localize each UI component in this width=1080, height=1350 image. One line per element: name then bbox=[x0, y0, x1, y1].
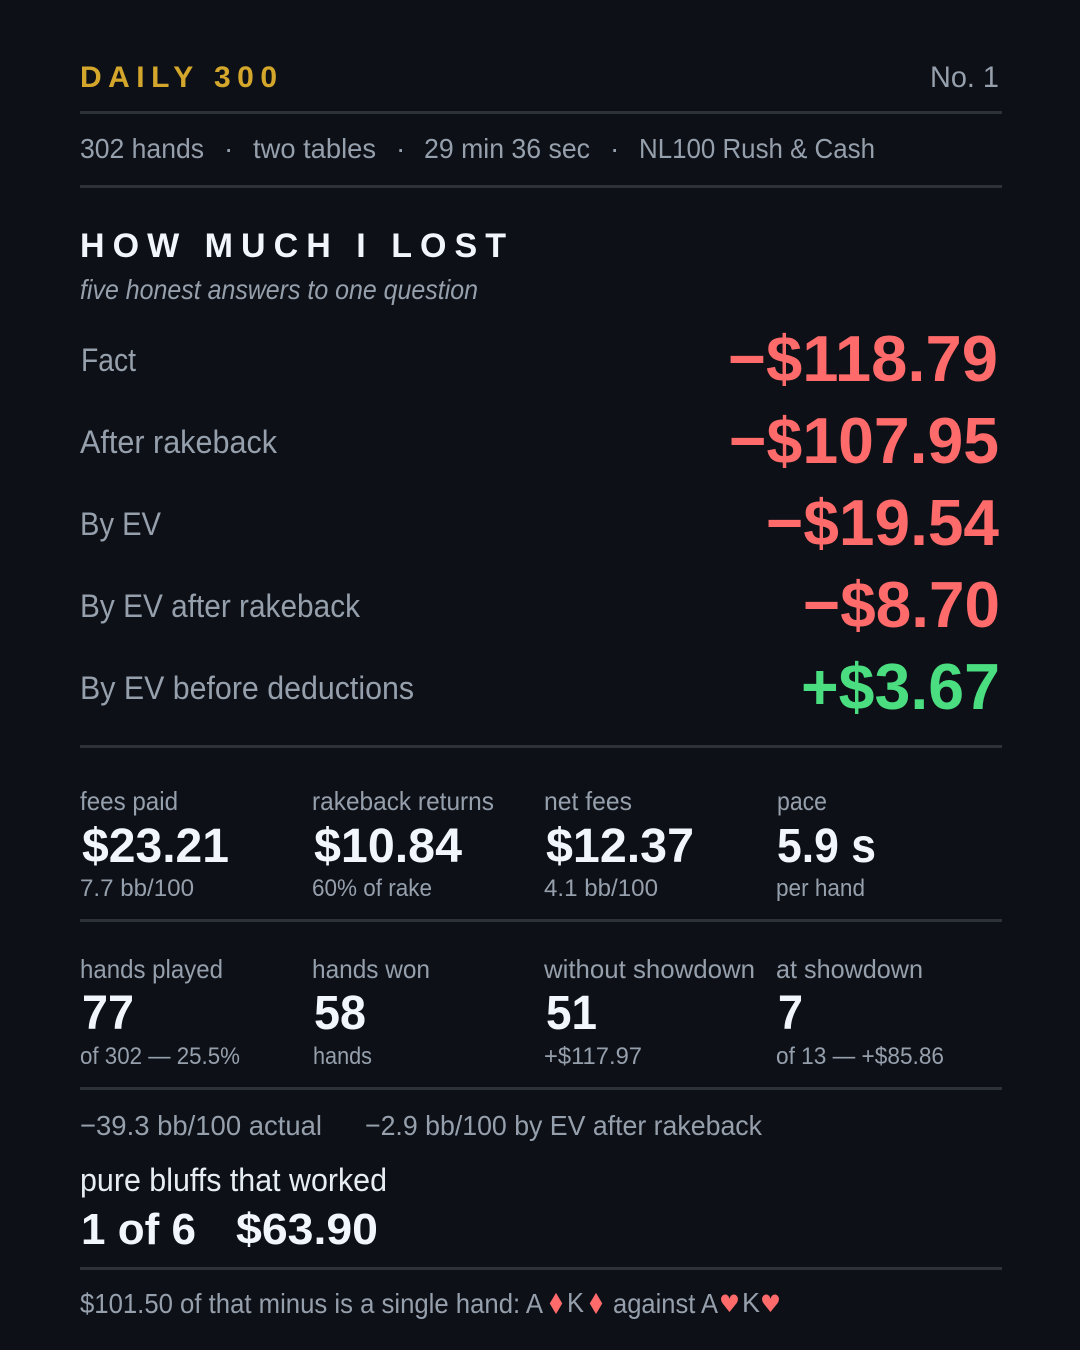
heading: how much I lost: HOW MUCH I LOST bbox=[80, 227, 506, 265]
stat: rakeback returns: $10.84 bbox=[314, 820, 462, 873]
row: by EV after rakeback bbox=[80, 568, 1000, 641]
stats row: fees bbox=[80, 786, 876, 902]
footer note: $101.50 of that minus is a single hand: A bbox=[80, 1288, 543, 1319]
title: Daily 300: DAILY 300 bbox=[80, 61, 277, 94]
footer note: ♦ bbox=[586, 1287, 606, 1321]
row: by EV before deductions: By EV before deductions bbox=[80, 670, 414, 706]
stat: fees paid: 7.7 bb/100 bbox=[80, 875, 194, 902]
stat: without showdown bbox=[543, 954, 755, 1070]
footer note: K bbox=[742, 1287, 760, 1318]
footer note: K bbox=[567, 1287, 584, 1318]
heading: how much I lost bbox=[80, 227, 506, 305]
stat: hands played bbox=[80, 954, 240, 1070]
pure bluffs bbox=[80, 1162, 387, 1254]
session summary: · bbox=[224, 133, 233, 164]
footer note: ♥ bbox=[760, 1290, 781, 1318]
stat: fees paid: fees paid bbox=[80, 786, 178, 816]
bb/100 line bbox=[80, 1110, 763, 1141]
footer note bbox=[80, 1287, 781, 1321]
stat: hands won: hands bbox=[313, 1043, 372, 1070]
session summary: 29 min 36 sec bbox=[424, 133, 590, 164]
stat: without showdown: 51 bbox=[546, 987, 597, 1040]
row: by EV: −$19.54 bbox=[766, 486, 999, 559]
row: by EV after rakeback: −$8.70 bbox=[803, 568, 1000, 641]
header bbox=[80, 61, 999, 94]
footer note: ♥ bbox=[719, 1290, 740, 1318]
row: after rakeback bbox=[80, 404, 999, 477]
stat: rakeback returns: rakeback returns bbox=[312, 786, 494, 816]
row: after rakeback: After rakeback bbox=[80, 424, 278, 460]
stat: pace: pace bbox=[777, 786, 827, 816]
row: fact: −$118.79 bbox=[728, 322, 998, 395]
stat: fees paid bbox=[80, 786, 229, 902]
row: by EV before deductions: +$3.67 bbox=[801, 650, 1000, 723]
stat: at showdown: 7 bbox=[778, 987, 803, 1040]
row: after rakeback: −$107.95 bbox=[729, 404, 999, 477]
row: by EV bbox=[80, 486, 999, 559]
stat: net fees: $12.37 bbox=[546, 820, 694, 873]
pure bluffs: 1 of 6 bbox=[81, 1205, 196, 1254]
stat: hands played: hands played bbox=[80, 954, 223, 984]
stat: fees paid: $23.21 bbox=[82, 820, 229, 873]
row: by EV after rakeback: By EV after rakeback bbox=[80, 588, 361, 624]
stat: hands won: 58 bbox=[314, 987, 366, 1040]
stat: at showdown: at showdown bbox=[776, 954, 923, 984]
stat: net fees: net fees bbox=[544, 786, 632, 816]
row: fact bbox=[81, 322, 998, 395]
stat: without showdown: +$117.97 bbox=[544, 1043, 642, 1070]
bb/100 line: −39.3 bb/100 actual bbox=[80, 1110, 322, 1141]
stats row: hands bbox=[80, 954, 944, 1070]
row: by EV before deductions bbox=[80, 650, 1000, 723]
session summary bbox=[80, 133, 875, 164]
subtitle: five honest answers to one question bbox=[80, 274, 478, 305]
session summary: two tables bbox=[253, 133, 376, 164]
stat: net fees: 4.1 bb/100 bbox=[544, 875, 658, 902]
stat: pace: per hand bbox=[776, 875, 865, 902]
stat: hands played: of 302 — 25.5% bbox=[80, 1043, 240, 1070]
footer note: against A bbox=[613, 1288, 718, 1319]
loss rows bbox=[80, 322, 1000, 723]
stat: pace bbox=[776, 786, 876, 902]
pure bluffs: pure bluffs that worked bbox=[80, 1162, 387, 1198]
stat: at showdown: of 13 — +$85.86 bbox=[776, 1043, 944, 1070]
stat: hands won: hands won bbox=[312, 954, 430, 984]
stat: hands won bbox=[312, 954, 430, 1070]
session summary: NL100 Rush & Cash bbox=[639, 133, 875, 164]
session summary: · bbox=[396, 133, 405, 164]
stat: pace: 5.9 s bbox=[777, 820, 876, 873]
row: fact: Fact bbox=[81, 342, 136, 378]
stat: net fees bbox=[544, 786, 694, 902]
stat: without showdown: without showdown bbox=[543, 954, 755, 984]
issue number: No. 1 bbox=[930, 61, 999, 94]
bb/100 line: −2.9 bb/100 by EV after rakeback bbox=[365, 1110, 763, 1141]
session summary: 302 hands bbox=[80, 133, 204, 164]
pure bluffs: $63.90 bbox=[236, 1205, 378, 1254]
stat: at showdown bbox=[776, 954, 944, 1070]
stat: rakeback returns: 60% of rake bbox=[312, 875, 432, 902]
stat: rakeback returns bbox=[312, 786, 494, 902]
stat: hands played: 77 bbox=[82, 987, 134, 1040]
footer note: ♦ bbox=[546, 1287, 566, 1321]
session summary: · bbox=[610, 133, 619, 164]
row: by EV: By EV bbox=[80, 506, 162, 542]
